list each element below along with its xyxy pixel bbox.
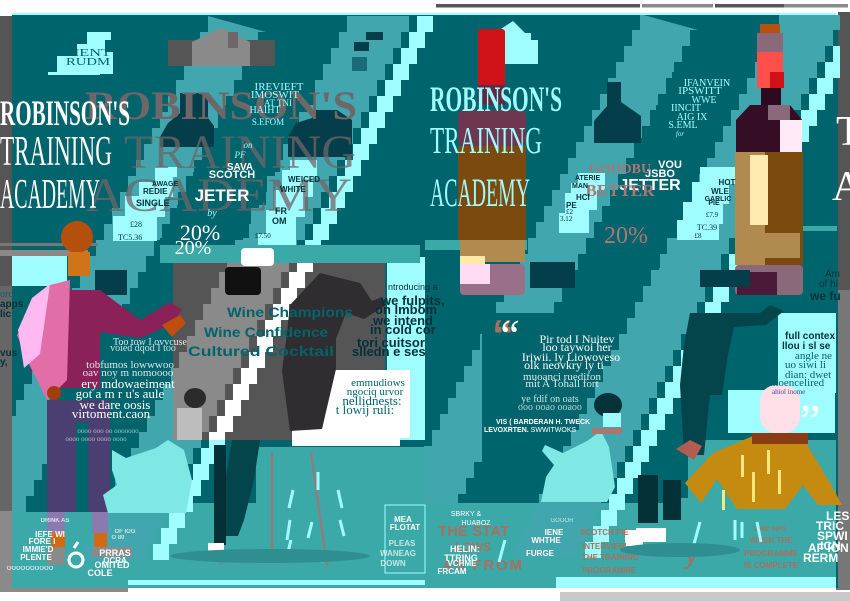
menu text left: £28 — [130, 220, 142, 229]
quote text left: oooo oooo oooo oooo — [65, 435, 127, 443]
quote text left: ery mdowaeiment — [81, 376, 175, 391]
bottom feature 7: PROGRAMME — [744, 549, 799, 558]
intro text right board: we fu — [809, 289, 841, 303]
icon: ampersand grey: y — [683, 538, 701, 569]
bottom feature 5: IENE — [545, 528, 564, 537]
quote text right: muoanci ruedifon — [523, 371, 601, 383]
menu text right: WEICED — [288, 175, 320, 184]
bottom feature 5 — [526, 518, 574, 558]
offer right: BETTER — [586, 181, 655, 200]
quote text right: Pir tod I Nuitev — [540, 332, 614, 346]
quote text right: mit A Tohall fort — [525, 378, 599, 390]
centre panel left — [160, 72, 315, 268]
diagonal bands left — [12, 16, 266, 512]
title cyan right — [430, 79, 562, 215]
centre panel offer left: JETER — [195, 186, 249, 205]
bottom feature 6: THE TRAINING — [582, 553, 639, 562]
glass and dark block — [225, 248, 274, 295]
bottom feature 2: O 80 — [111, 535, 125, 541]
intro text left board — [352, 282, 445, 359]
offer right: JSBO — [645, 168, 675, 180]
menu text mid right: PE — [566, 201, 577, 210]
bottom feature 1: DRINK AS — [41, 518, 69, 524]
right board body — [768, 350, 832, 396]
menu text far right: TC.39 — [697, 223, 717, 232]
menu text far right: PIE — [708, 200, 720, 207]
left text body cyan box: apps — [0, 299, 24, 310]
bottom feature 7: WINE INFO — [754, 527, 786, 533]
bottom feature 5: FURGE — [526, 549, 555, 558]
menu text mid right: 3.12 — [560, 215, 573, 223]
quote text left: voied dqod I too — [110, 343, 176, 354]
intro text left board: ntroducing a — [388, 282, 438, 292]
bottom feature 4: HUABOZ — [461, 520, 491, 527]
menu text far right: £7.9 — [706, 211, 719, 219]
centre panel text right: IINCIT — [671, 103, 701, 114]
white board text: ngociq urvor — [347, 386, 404, 398]
intro text right board: llou i sl se — [782, 341, 831, 352]
quote marks — [492, 311, 820, 446]
menu text left: REDIE — [143, 187, 168, 196]
bottom feature 1: OOOOOOOOOO — [7, 566, 54, 572]
intro text left board: we intend — [372, 313, 433, 328]
title white left: ACADEMY — [0, 172, 100, 218]
left text body cyan box: lic — [0, 309, 12, 320]
menu text mid right: MAN — [572, 183, 588, 190]
bottom feature 1 — [7, 518, 69, 572]
centre panel text right: WWE — [692, 95, 716, 106]
intro text right board: full contex — [785, 331, 835, 342]
centre panel text left: IREVIEFT — [255, 81, 304, 93]
bottom feature 4: AS FROM — [442, 557, 522, 574]
bottom feature 8 — [803, 509, 849, 565]
centre panel text right: for — [676, 130, 684, 138]
centre panel text left: PF — [234, 150, 246, 160]
right board body: dian: dwet — [785, 369, 831, 381]
title cyan right: TRAINING — [430, 120, 542, 162]
bottom feature 2: OCRA — [103, 556, 127, 565]
quote panel right — [482, 313, 688, 498]
bottom feature 3: PLEAS — [389, 539, 416, 548]
menu text right: £7.50 — [255, 232, 271, 240]
attribution right: LEVOXRTEN. SWWITWOKS — [484, 427, 577, 434]
bottom feature 2: PRRAS — [99, 548, 131, 558]
bottom feature 2: OMITED — [94, 560, 130, 570]
cyan seated figure left — [103, 440, 192, 513]
offer right: JETTER — [619, 177, 681, 194]
bottom chevron icons — [287, 472, 761, 562]
attribution right — [484, 419, 590, 434]
centre panel text left: AT TNI — [264, 98, 292, 108]
centre panel offer left: SCOTCH — [209, 169, 255, 181]
right board body: uo siwi li — [785, 359, 826, 371]
top bar — [436, 4, 848, 8]
quote text right: olk neovkry ly ti — [524, 358, 604, 372]
logo left: RUDM — [66, 56, 110, 68]
logo left: BIENT — [63, 47, 111, 59]
menu text right: FR — [275, 206, 287, 216]
quote text left: we dare oosis — [80, 397, 150, 412]
menu text mid right: HCI — [576, 193, 590, 202]
menu text right — [255, 175, 320, 240]
intro text right board: of hi — [819, 279, 838, 290]
bottom feature 2: OF IOG — [114, 529, 136, 535]
white board text: t lowij ruli: — [336, 402, 394, 417]
menu text mid right — [560, 175, 600, 223]
logo right — [480, 21, 538, 64]
bottom feature 4 — [438, 511, 522, 576]
icon: glass left — [69, 542, 83, 567]
centre panel text left: S.EFOM — [252, 117, 284, 127]
left text body cyan box: orcane — [0, 289, 27, 300]
quote text left: oav noy m nomoooo — [83, 367, 174, 379]
shadow ellipses — [170, 543, 740, 563]
bottom feature 2 — [87, 529, 136, 578]
centre panel right — [594, 72, 738, 268]
menu text right: WHITE — [280, 185, 306, 194]
quote text left: got a m r u's aule — [76, 386, 165, 401]
menu boxes — [113, 160, 735, 250]
horizontal rules — [0, 226, 837, 263]
title grey: ACADEMY — [86, 169, 352, 222]
bottom feature 8: ICN — [820, 539, 841, 553]
centre panel text right: IFANVEIN — [684, 78, 730, 89]
title cyan right: ACADEMY — [430, 170, 530, 215]
centre panel text left: IMOSWIT — [251, 89, 299, 101]
left text body cyan box — [0, 289, 27, 368]
bottom speckle — [560, 592, 850, 601]
intro text left board: we fulpits, — [380, 293, 445, 308]
intro text left board: slledn e ses — [352, 344, 426, 359]
price left: by — [207, 208, 217, 219]
bottom strip — [12, 440, 836, 588]
gray panel heading: Wine Confidence — [204, 324, 328, 340]
menu text far right: HOT — [719, 178, 736, 187]
quote text left — [65, 337, 188, 443]
right presenter — [625, 305, 784, 546]
intro text left board: tori cuitsor — [357, 335, 425, 350]
right board body: ahiol inome — [772, 388, 805, 396]
bottom feature 6: INTERVIEW — [582, 542, 627, 551]
title cyan right: ROBINSON'S — [430, 79, 562, 119]
gray panel heading: Wine Champions — [227, 304, 353, 320]
gray overlay panel — [173, 263, 385, 440]
logo left — [48, 32, 113, 75]
left person — [17, 221, 186, 565]
gray panel heading — [188, 304, 353, 359]
title white left — [0, 93, 130, 218]
bottom feature 8: AF ION — [808, 541, 849, 555]
bottom feature 7: IS COMPLETE — [744, 561, 799, 570]
bottom feature 1: PLENTE — [20, 553, 52, 562]
bottom feature 6: PROGRAMME — [582, 566, 636, 575]
menu text mid right: ATERIE — [575, 175, 600, 182]
bottom feature 4: HELIN: — [450, 544, 480, 554]
quote marks: ” — [800, 395, 820, 446]
centre panel text left: HAIHT — [249, 105, 281, 116]
bottom feature 4: TTRING — [444, 553, 478, 563]
title grey: ROBINSON'S — [85, 83, 357, 128]
logo overlay grey — [168, 28, 275, 66]
menu text mid right: £2 — [566, 208, 574, 216]
bottom feature 3: FLOTAT — [390, 523, 420, 532]
centre panel text right: IPSWITT — [678, 85, 722, 97]
offer right: VOU — [658, 159, 682, 171]
bottom feature 3 — [380, 505, 425, 573]
bottle: right — [735, 24, 803, 295]
bottom feature 4: FRCAM — [438, 567, 467, 576]
centre panel offer left — [195, 162, 255, 205]
bottom feature 2: COLE — [87, 568, 113, 578]
quote marks: “ — [492, 311, 514, 360]
right board body: enoencelired — [768, 377, 825, 389]
white board text — [336, 377, 405, 417]
quote panel left — [50, 313, 256, 503]
bottom feature 1: IMMIE'D — [23, 545, 54, 554]
quote text left: Too tow I ovvcuse — [113, 337, 188, 348]
bottom feature 6: SCOTCH PIE — [580, 528, 630, 537]
right board body: angle ne — [795, 350, 832, 362]
bottom feature 4: LOWS — [455, 540, 491, 554]
attribution right: VIS ( BARDERAN H. TWECK — [496, 419, 590, 426]
intro text right board: Am — [825, 269, 840, 280]
title white left: ROBINSON'S — [0, 93, 130, 133]
bottom feature 7: WHEN THE — [750, 536, 793, 545]
intro text left board: on Imbom — [375, 302, 437, 317]
bottom feature 8: TRIC — [816, 519, 844, 533]
bottom feature 1: IEFE WI — [35, 530, 65, 539]
head in panel — [592, 393, 622, 434]
offer right — [586, 159, 682, 200]
white board text: emmudiows — [351, 377, 405, 389]
gray panel heading: Cultured Cocktail — [188, 343, 334, 359]
menu text left: SINGLE — [136, 198, 170, 208]
cyan seated figure right — [541, 431, 615, 502]
centre panel text left — [234, 81, 304, 160]
price left: 20% — [180, 220, 220, 245]
bottom feature 8: RERM — [803, 551, 838, 565]
bottom feature 3: MEA — [394, 515, 412, 524]
bottom feature 8: SPWI — [817, 529, 848, 543]
bottom feature 7 — [744, 527, 799, 570]
left text body cyan box: vus — [0, 348, 18, 359]
bottom feature 1: FORE I — [29, 537, 55, 546]
cyan boards — [12, 256, 836, 446]
yellow person — [676, 385, 842, 510]
quote text right — [518, 332, 620, 413]
title white left: TRAINING — [0, 129, 112, 175]
centre panel offer left: SAVA — [227, 162, 253, 173]
price left: 20% — [175, 237, 211, 259]
menu text far right: WLE — [711, 187, 730, 196]
title grey — [85, 83, 357, 222]
easel — [220, 450, 327, 566]
bottom feature 6 — [580, 528, 639, 575]
title grey: TRAINING — [124, 126, 356, 179]
quote marks: “ — [496, 311, 520, 360]
dark presenter — [177, 273, 386, 560]
quote text right: Iriwii. ly Liowoveso — [522, 350, 620, 364]
title far right — [832, 109, 850, 210]
quote text left: oooo ooo oo ooooooo — [77, 427, 139, 435]
centre panel text right: S.EML — [668, 120, 698, 131]
bottom feature 4: THE STAT — [438, 523, 509, 540]
intro text right board — [782, 269, 841, 352]
offer right: GOODBU — [589, 162, 651, 177]
diagonal bands right — [424, 15, 698, 503]
price right: 20% — [604, 223, 648, 249]
menu text right: OM — [272, 216, 286, 226]
bottle: red — [458, 29, 526, 295]
bottom feature 3: DOWN — [380, 559, 406, 568]
quote text right: ooo ooao ooaoo — [518, 402, 582, 413]
menu text far right: £8 — [694, 232, 702, 240]
bottom feature 4: VCHME — [448, 559, 477, 568]
menu text left: TC5.36 — [118, 233, 142, 242]
dark bottle silhouettes — [95, 32, 750, 295]
menu text far right — [694, 178, 736, 240]
bottom feature 4: SBRKY & — [451, 511, 481, 518]
centre panel text right: AIG IX — [677, 112, 708, 123]
menu text far right: GARLIC — [705, 196, 731, 203]
menu text left: AWAGE — [152, 181, 178, 188]
price left — [175, 208, 220, 259]
left text body cyan box: y, — [0, 357, 8, 368]
quote text left: virtoment.caon — [72, 406, 151, 421]
bottom feature 5: GOOOR — [550, 518, 574, 524]
centre panel text right — [668, 78, 730, 138]
bottom feature 8: LES — [826, 509, 849, 523]
intro text left board: in cold cor — [370, 322, 436, 337]
white board text: nellidnests: — [342, 393, 402, 408]
menu text left — [118, 181, 178, 242]
quote text right: loo taywoi her — [542, 340, 612, 354]
bottom feature 3: WANEAG — [380, 549, 416, 558]
bottom feature 5: WHTHE — [531, 536, 561, 545]
centre panel text left: on — [244, 140, 253, 150]
quote text left: tobfumos lowwwoo — [86, 359, 174, 371]
quote text right: ye fdif on oats — [521, 394, 579, 405]
